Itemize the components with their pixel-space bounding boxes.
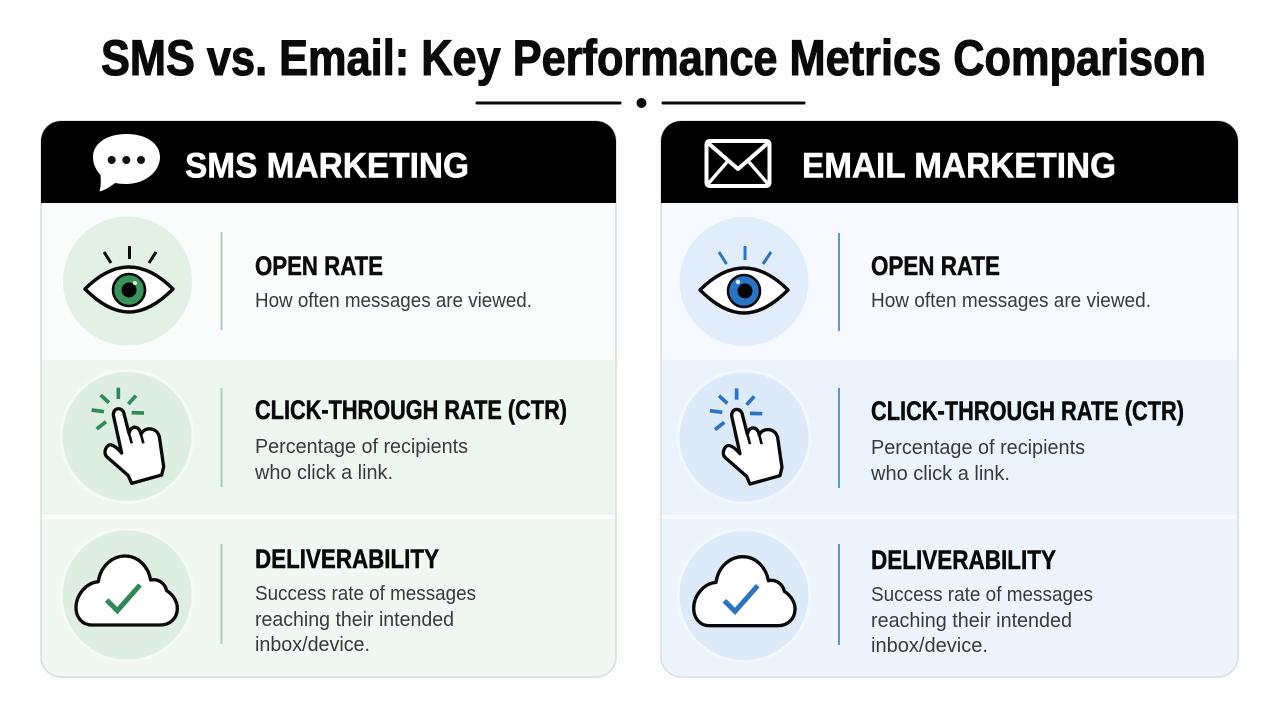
row: SMS open rate (63, 216, 532, 346)
metric text: inbox/device. (871, 634, 988, 657)
metric text: How often messages are viewed. (871, 289, 1151, 312)
metric text: CLICK-THROUGH RATE (CTR) (255, 395, 567, 425)
metric text: Percentage of recipients (871, 436, 1085, 459)
metric text: OPEN RATE (255, 251, 383, 281)
metric text (870, 396, 1184, 485)
metric text (254, 395, 567, 484)
row: Email open rate (680, 217, 1151, 346)
metric text (255, 251, 532, 312)
metric text: DELIVERABILITY (871, 545, 1056, 575)
metric text (871, 545, 1093, 657)
SMS heading: SMS MARKETING (185, 146, 469, 186)
SMS header bar (41, 121, 616, 203)
icon: speech bubble (93, 134, 160, 192)
metric text (255, 544, 476, 656)
metric text: reaching their intended (871, 609, 1072, 632)
metric text: reaching their intended (255, 608, 454, 631)
Email header bar (661, 121, 1238, 203)
metric text: inbox/device. (255, 633, 370, 656)
metric text: How often messages are viewed. (255, 289, 532, 312)
icon: blue pointer (678, 371, 810, 503)
row: Email deliverability (678, 530, 1093, 662)
icon: green cloud check (61, 529, 193, 661)
title divider (477, 100, 804, 106)
icon: green pointer (61, 370, 193, 502)
metric text: Success rate of messages (255, 582, 476, 605)
metric text: who click a link. (870, 462, 1010, 485)
Email heading: EMAIL MARKETING (802, 146, 1116, 186)
panel: Email marketing (661, 121, 1238, 677)
metric text: who click a link. (254, 461, 393, 484)
row: SMS click-through rate (61, 370, 567, 502)
row: Email click-through rate (678, 371, 1184, 503)
metric text: DELIVERABILITY (255, 544, 439, 574)
row: SMS deliverability (61, 529, 476, 661)
panel: SMS marketing (41, 121, 616, 677)
icon: envelope (706, 141, 770, 186)
metric text: CLICK-THROUGH RATE (CTR) (871, 396, 1184, 426)
metric text: OPEN RATE (871, 251, 1000, 281)
metric text: Percentage of recipients (255, 435, 468, 458)
metric text: Success rate of messages (871, 583, 1093, 606)
metric text (871, 251, 1151, 312)
icon: blue cloud check (678, 530, 810, 662)
icon: green eye (63, 216, 192, 346)
icon: blue eye (680, 217, 808, 346)
